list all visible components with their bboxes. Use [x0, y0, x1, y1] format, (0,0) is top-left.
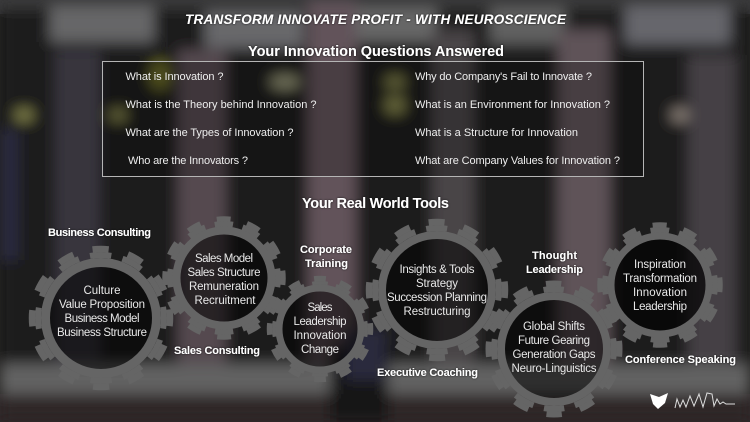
gear: corporate training: Change: [301, 344, 339, 356]
gear: thought leadership: Neuro-Linguistics: [512, 363, 597, 375]
right questions: [415, 71, 620, 167]
gear: conference speaking: [600, 225, 720, 345]
gear: business consulting: Value Proposition: [59, 299, 145, 311]
gear labels: Thought: [532, 250, 577, 262]
gear labels: [48, 227, 736, 379]
left questions: What is the Theory behind Innovation ?: [126, 99, 316, 111]
gear: conference speaking: Innovation: [633, 287, 687, 299]
title: TRANSFORM INNOVATE PROFIT - WITH NEUROSCIENCE: [185, 12, 567, 27]
gear: business consulting: Business Model: [64, 313, 140, 325]
gear: corporate training: Sales: [308, 302, 333, 314]
left questions: What is Innovation ?: [126, 71, 224, 83]
gear: business consulting: [32, 249, 170, 387]
questions box: [102, 62, 644, 176]
left questions: Who are the Innovators ?: [128, 155, 248, 167]
logo: butterfly and signature: [650, 393, 735, 409]
gear labels: Corporate: [300, 244, 352, 256]
gear: executive coaching: Insights & Tools: [400, 264, 475, 276]
gear: thought leadership: Global Shifts: [523, 321, 585, 333]
left questions: [126, 71, 316, 167]
gear labels: Training: [305, 258, 348, 270]
gear labels: Sales Consulting: [174, 345, 260, 357]
gear: executive coaching: Strategy: [416, 278, 458, 290]
right questions: Why do Company's Fail to Innovate ?: [415, 71, 592, 83]
gear labels: Leadership: [526, 264, 583, 276]
right questions: What is an Environment for Innovation ?: [415, 99, 610, 111]
gear: conference speaking: Transformation: [623, 273, 697, 285]
gear: thought leadership: [488, 284, 620, 414]
gear: conference speaking: Inspiration: [634, 259, 686, 271]
gear: sales consulting: Recruitment: [194, 295, 256, 307]
gear labels: Executive Coaching: [377, 367, 478, 379]
gear: sales consulting: [165, 219, 283, 337]
gear: thought leadership: Generation Gaps: [512, 349, 596, 361]
gear: sales consulting: Sales Model: [195, 253, 253, 265]
heading: questions: Your Innovation Questions Answered: [248, 44, 504, 60]
gear labels: Business Consulting: [48, 227, 151, 239]
right questions: What is a Structure for Innovation: [415, 127, 578, 139]
gear: business consulting: Business Structure: [57, 327, 147, 339]
gear: corporate training: Innovation: [294, 330, 346, 342]
right questions: What are Company Values for Innovation ?: [415, 155, 620, 167]
gear: business consulting: Culture: [83, 285, 121, 297]
gear: thought leadership: Future Gearing: [518, 335, 590, 347]
gear labels: Conference Speaking: [625, 354, 736, 366]
heading: tools: Your Real World Tools: [302, 196, 449, 212]
gear: sales consulting: Sales Structure: [188, 267, 260, 279]
gear: conference speaking: Leadership: [633, 301, 687, 313]
gear: executive coaching: [369, 222, 505, 358]
gear: executive coaching: Restructuring: [404, 306, 470, 318]
gear: corporate training: [270, 278, 370, 380]
left questions: What are the Types of Innovation ?: [126, 127, 294, 139]
gear: sales consulting: Remuneration: [189, 281, 259, 293]
gear: executive coaching: Succession Planning: [387, 292, 487, 304]
gear: corporate training: Leadership: [294, 316, 346, 328]
